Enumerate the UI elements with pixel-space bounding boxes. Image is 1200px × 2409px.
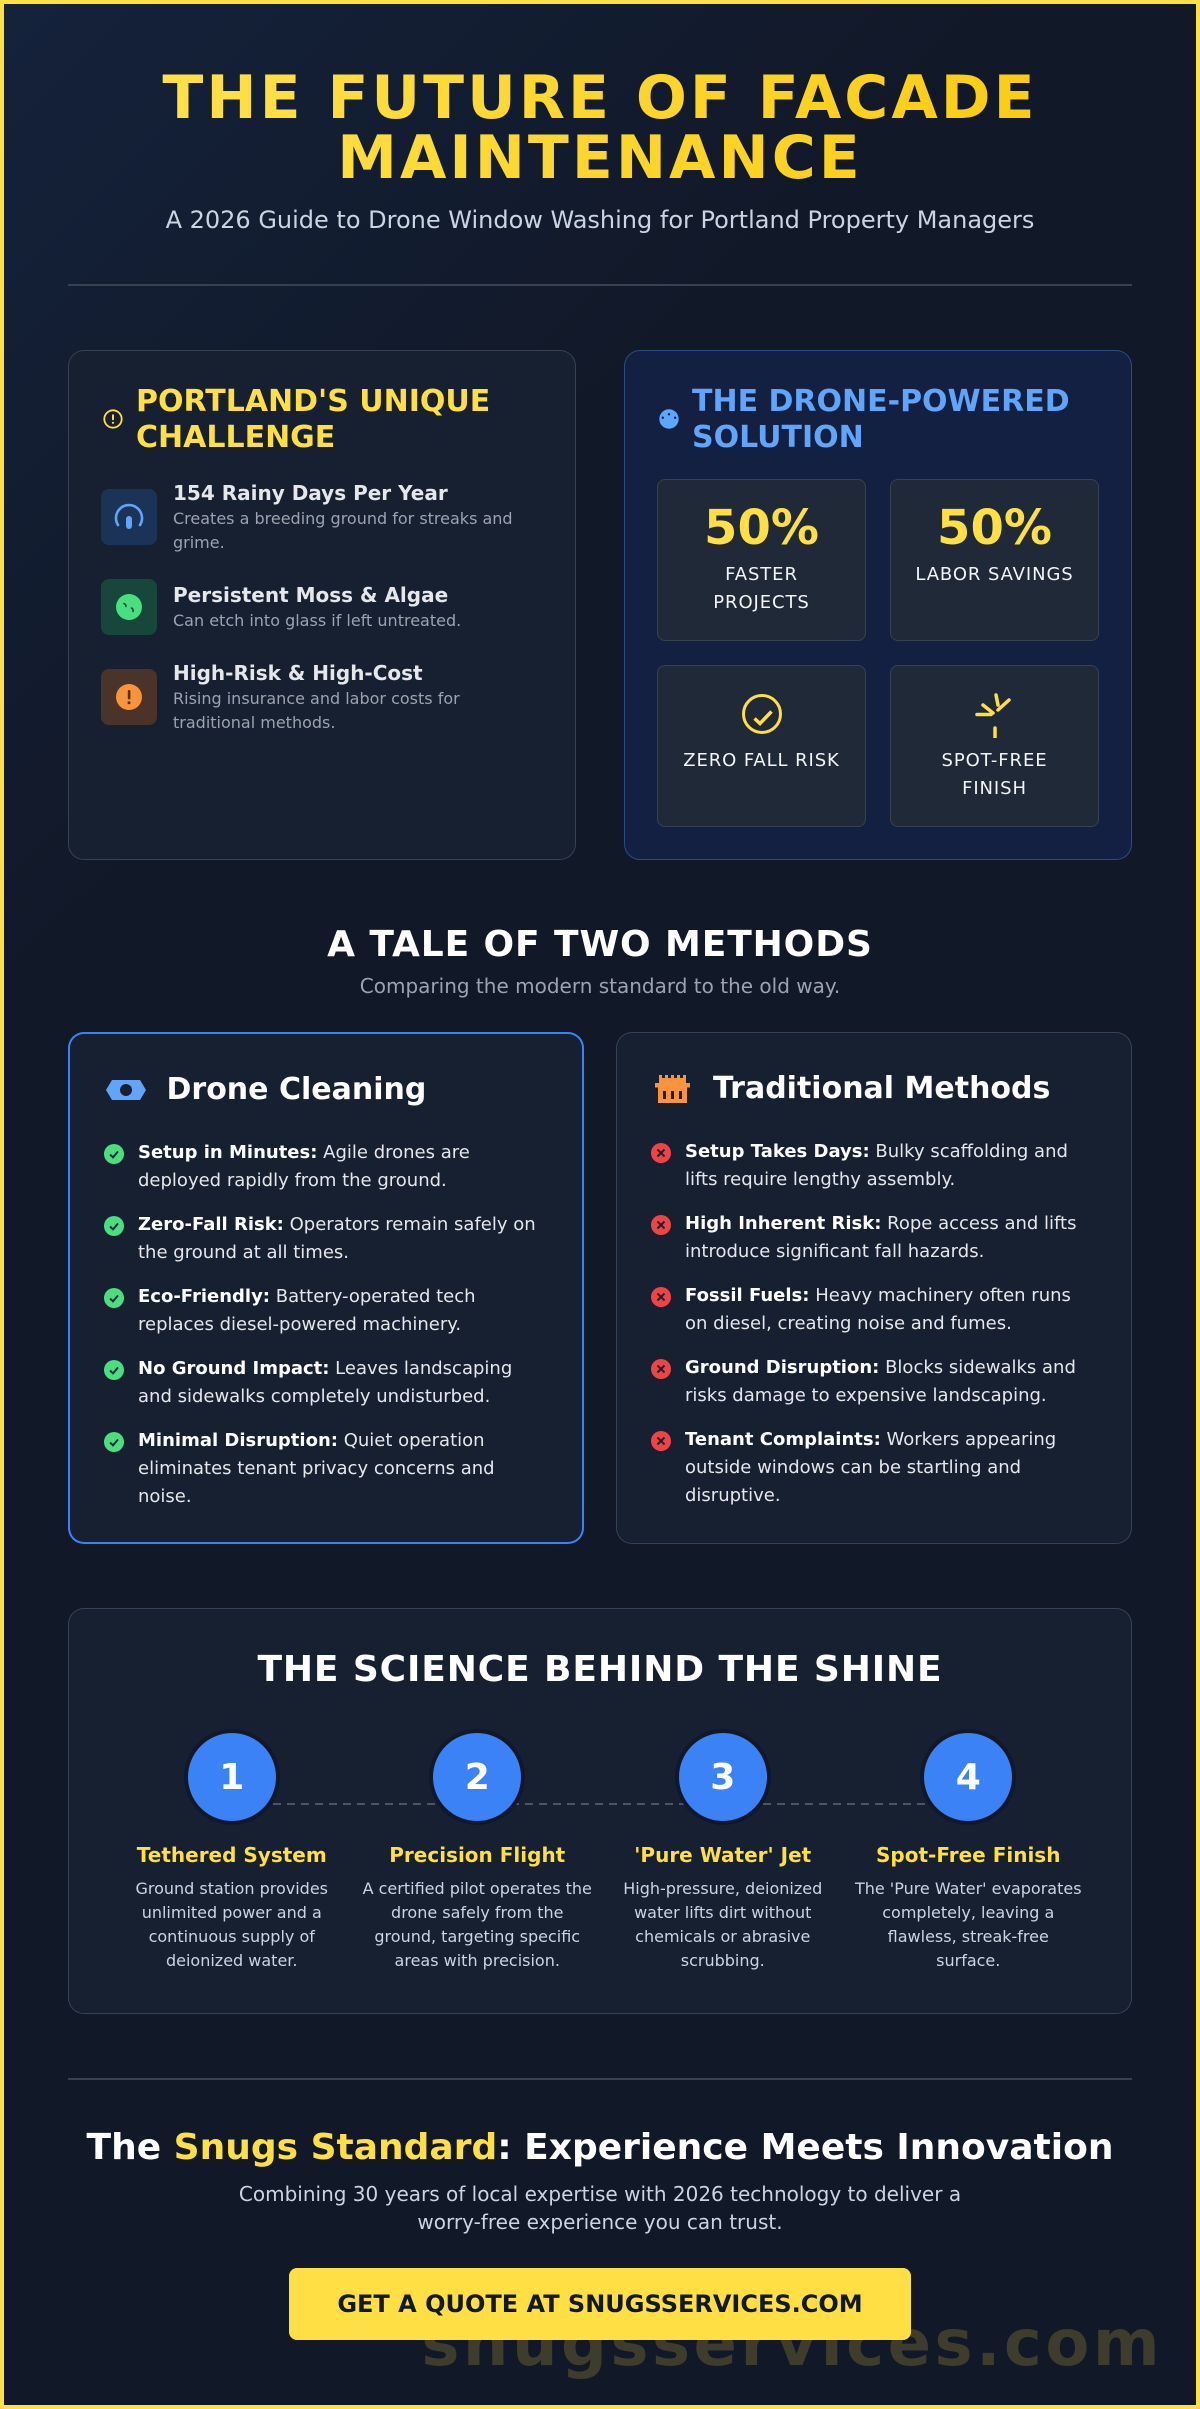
list item: ground disruption bbox=[651, 1357, 1076, 1406]
number: 1: 1 bbox=[219, 1757, 244, 1798]
list item: setup takes days bbox=[651, 1141, 1068, 1190]
text: closing statement: worry-free experience you can trust. bbox=[417, 2210, 783, 2234]
step 2 bbox=[362, 1729, 592, 1970]
list item: setup in minutes: Setup in Minutes: Agile drones are bbox=[138, 1142, 470, 1163]
button: get a quote bbox=[289, 2268, 911, 2340]
number: 3 bbox=[675, 1729, 771, 1825]
stat: faster projects bbox=[657, 479, 866, 641]
text: rainy days description: Creates a breeding ground for streaks and bbox=[173, 509, 513, 528]
step description: A certified pilot operates the bbox=[363, 1879, 592, 1898]
step description: ground, targeting specific bbox=[374, 1927, 580, 1946]
list item: zero-fall risk: the ground at all times. bbox=[138, 1242, 349, 1263]
stat: spot-free finish bbox=[890, 665, 1099, 827]
label: spot-free finish: FINISH bbox=[962, 778, 1027, 799]
icon: warning circle bbox=[103, 409, 123, 429]
step description: water lifts dirt without bbox=[634, 1903, 811, 1922]
heading: snugs standard: The Snugs Standard: Experience Meets Innovation bbox=[87, 2127, 1113, 2168]
connector: dashed line bbox=[273, 1803, 925, 1805]
list item: fossil fuels: on diesel, creating noise and fumes. bbox=[685, 1313, 1012, 1334]
heading: solution bbox=[692, 384, 1070, 455]
label: faster projects: FASTER bbox=[725, 564, 798, 585]
stat: zero fall risk bbox=[657, 665, 866, 827]
panel: the science behind the shine bbox=[68, 1608, 1132, 2014]
text: risk description: Rising insurance and labor costs for bbox=[173, 689, 460, 708]
list item: ground disruption: Ground Disruption: Blocks sidewalks and bbox=[685, 1357, 1076, 1378]
list item: high inherent risk bbox=[651, 1213, 1076, 1262]
step 4 bbox=[854, 1729, 1082, 1970]
step description: deionized water. bbox=[166, 1951, 298, 1970]
button: get a quote: GET A QUOTE AT SNUGSSERVICES.COM bbox=[337, 2290, 863, 2318]
label: faster projects: PROJECTS bbox=[713, 592, 810, 613]
item: high risk and cost bbox=[101, 661, 460, 732]
step description: drone safely from the bbox=[391, 1903, 563, 1922]
text: moss description: Can etch into glass if left untreated. bbox=[173, 611, 461, 630]
number: 3: 3 bbox=[710, 1757, 735, 1798]
icon: alert bbox=[101, 669, 157, 725]
label: spot-free finish: SPOT-FREE bbox=[942, 750, 1048, 771]
step description: The 'Pure Water' evaporates bbox=[855, 1879, 1082, 1898]
item: moss and algae bbox=[101, 579, 461, 635]
divider bbox=[68, 2078, 1132, 2080]
step title: 'Pure Water' Jet bbox=[634, 1843, 811, 1867]
text: rainy days description: grime. bbox=[173, 533, 225, 552]
list item: zero-fall risk bbox=[104, 1214, 536, 1263]
heading: challenge: PORTLAND'S UNIQUE bbox=[136, 384, 490, 419]
heading: solution: SOLUTION bbox=[692, 420, 864, 455]
text: rainy days title: 154 Rainy Days Per Year bbox=[173, 481, 448, 505]
icon: drone bbox=[106, 1080, 146, 1100]
list item: eco-friendly: replaces diesel-powered machinery. bbox=[138, 1314, 461, 1335]
number: 4 bbox=[920, 1729, 1016, 1825]
list item: minimal disruption: noise. bbox=[138, 1486, 192, 1507]
title: THE FUTURE OF FACADE bbox=[162, 63, 1038, 133]
panel: traditional methods bbox=[616, 1032, 1132, 1544]
heading: drone cleaning: Drone Cleaning bbox=[166, 1072, 426, 1107]
step 3 bbox=[623, 1729, 822, 1970]
subtitle: A 2026 Guide to Drone Window Washing for Portland Property Managers bbox=[166, 206, 1034, 234]
text: closing statement: Combining 30 years of local expertise with 2026 technology to deliver a bbox=[239, 2182, 961, 2206]
step description: areas with precision. bbox=[395, 1951, 560, 1970]
heading: solution: THE DRONE-POWERED bbox=[692, 384, 1070, 419]
step description bbox=[362, 1879, 592, 1970]
step description: chemicals or abrasive bbox=[635, 1927, 810, 1946]
list item: tenant complaints: Tenant Complaints: Workers appearing bbox=[685, 1429, 1056, 1450]
step description: scrubbing. bbox=[681, 1951, 765, 1970]
list item: fossil fuels: Fossil Fuels: Heavy machinery often runs bbox=[685, 1285, 1071, 1306]
divider bbox=[68, 284, 1132, 286]
text: closing statement bbox=[239, 2182, 961, 2234]
step description: flawless, streak-free bbox=[888, 1927, 1049, 1946]
icon: scaffold bbox=[655, 1075, 690, 1103]
panel: drone cleaning bbox=[68, 1032, 584, 1544]
list item: setup in minutes bbox=[104, 1142, 470, 1191]
list item: no ground impact: No Ground Impact: Leaves landscaping bbox=[138, 1358, 512, 1379]
number: 2 bbox=[429, 1729, 525, 1825]
text: risk description: traditional methods. bbox=[173, 713, 335, 732]
step description bbox=[135, 1879, 328, 1970]
list item: setup takes days: Setup Takes Days: Bulky scaffolding and bbox=[685, 1141, 1068, 1162]
number: 2: 2 bbox=[465, 1757, 490, 1798]
text: risk title: High-Risk & High-Cost bbox=[173, 661, 423, 685]
step description: completely, leaving a bbox=[882, 1903, 1054, 1922]
list item: tenant complaints bbox=[651, 1429, 1056, 1506]
list item: eco-friendly: Eco-Friendly: Battery-operated tech bbox=[138, 1286, 476, 1307]
label: labor savings: LABOR SAVINGS bbox=[915, 564, 1074, 585]
heading: challenge bbox=[136, 384, 490, 455]
step title: Tethered System bbox=[137, 1843, 327, 1867]
panel: drone-powered solution bbox=[624, 350, 1132, 860]
watermark: snugsservices.com bbox=[421, 2307, 1163, 2381]
text: rainy days description bbox=[173, 509, 513, 552]
label: faster projects bbox=[713, 564, 810, 613]
step description bbox=[623, 1879, 822, 1970]
list item: minimal disruption: Minimal Disruption: Quiet operation bbox=[138, 1430, 485, 1451]
step description: High-pressure, deionized bbox=[623, 1879, 822, 1898]
list item: high inherent risk: High Inherent Risk: Rope access and lifts bbox=[685, 1213, 1076, 1234]
list item: zero-fall risk: Zero-Fall Risk: Operators remain safely on bbox=[138, 1214, 536, 1235]
list item: high inherent risk: introduce significant fall hazards. bbox=[685, 1241, 984, 1262]
title: MAINTENANCE bbox=[337, 123, 863, 193]
number: 50%: 50% bbox=[937, 500, 1052, 556]
step description: continuous supply of bbox=[149, 1927, 315, 1946]
label: spot-free finish bbox=[942, 750, 1048, 799]
list item: fossil fuels bbox=[651, 1285, 1071, 1334]
label: zero fall risk: ZERO FALL RISK bbox=[683, 750, 840, 771]
panel: Portland's unique challenge bbox=[68, 350, 576, 860]
list item: ground disruption: risks damage to expensive landscaping. bbox=[685, 1385, 1047, 1406]
list item: no ground impact bbox=[104, 1358, 512, 1407]
step description: Ground station provides bbox=[135, 1879, 328, 1898]
icon: drone dot bbox=[659, 409, 679, 429]
list item: eco-friendly bbox=[104, 1286, 476, 1335]
list item: tenant complaints: disruptive. bbox=[685, 1485, 781, 1506]
list item: setup takes days: lifts require lengthy assembly. bbox=[685, 1169, 955, 1190]
text: moss title: Persistent Moss & Algae bbox=[173, 583, 448, 607]
text: risk description bbox=[173, 689, 460, 732]
number: 4: 4 bbox=[956, 1757, 981, 1798]
icon: check circle bbox=[742, 694, 782, 734]
item: rainy days bbox=[101, 481, 513, 552]
heading: a tale of two methods: A TALE OF TWO METHODS bbox=[327, 924, 873, 965]
step 1 bbox=[135, 1729, 328, 1970]
step title: Spot-Free Finish bbox=[876, 1843, 1060, 1867]
heading: challenge: CHALLENGE bbox=[136, 420, 335, 455]
heading: traditional methods: Traditional Methods bbox=[713, 1071, 1050, 1106]
step description: surface. bbox=[936, 1951, 1000, 1970]
list item: minimal disruption bbox=[104, 1430, 495, 1507]
step description: unlimited power and a bbox=[142, 1903, 322, 1922]
list item: minimal disruption: eliminates tenant privacy concerns and bbox=[138, 1458, 495, 1479]
number: 1 bbox=[184, 1729, 280, 1825]
title bbox=[0, 68, 1200, 188]
icon: moss bbox=[101, 579, 157, 635]
list item: tenant complaints: outside windows can be startling and bbox=[685, 1457, 1021, 1478]
icon: rain bbox=[101, 489, 157, 545]
heading: science: THE SCIENCE BEHIND THE SHINE bbox=[257, 1649, 943, 1690]
step description bbox=[854, 1879, 1082, 1970]
list item: no ground impact: and sidewalks completely undisturbed. bbox=[138, 1386, 490, 1407]
number: 50%: 50% bbox=[704, 500, 819, 556]
stat: labor savings bbox=[890, 479, 1099, 641]
step title: Precision Flight bbox=[389, 1843, 565, 1867]
subheading: comparison: Comparing the modern standard to the old way. bbox=[360, 974, 840, 998]
list item: setup in minutes: deployed rapidly from the ground. bbox=[138, 1170, 447, 1191]
icon: sparkle bbox=[975, 693, 1011, 738]
